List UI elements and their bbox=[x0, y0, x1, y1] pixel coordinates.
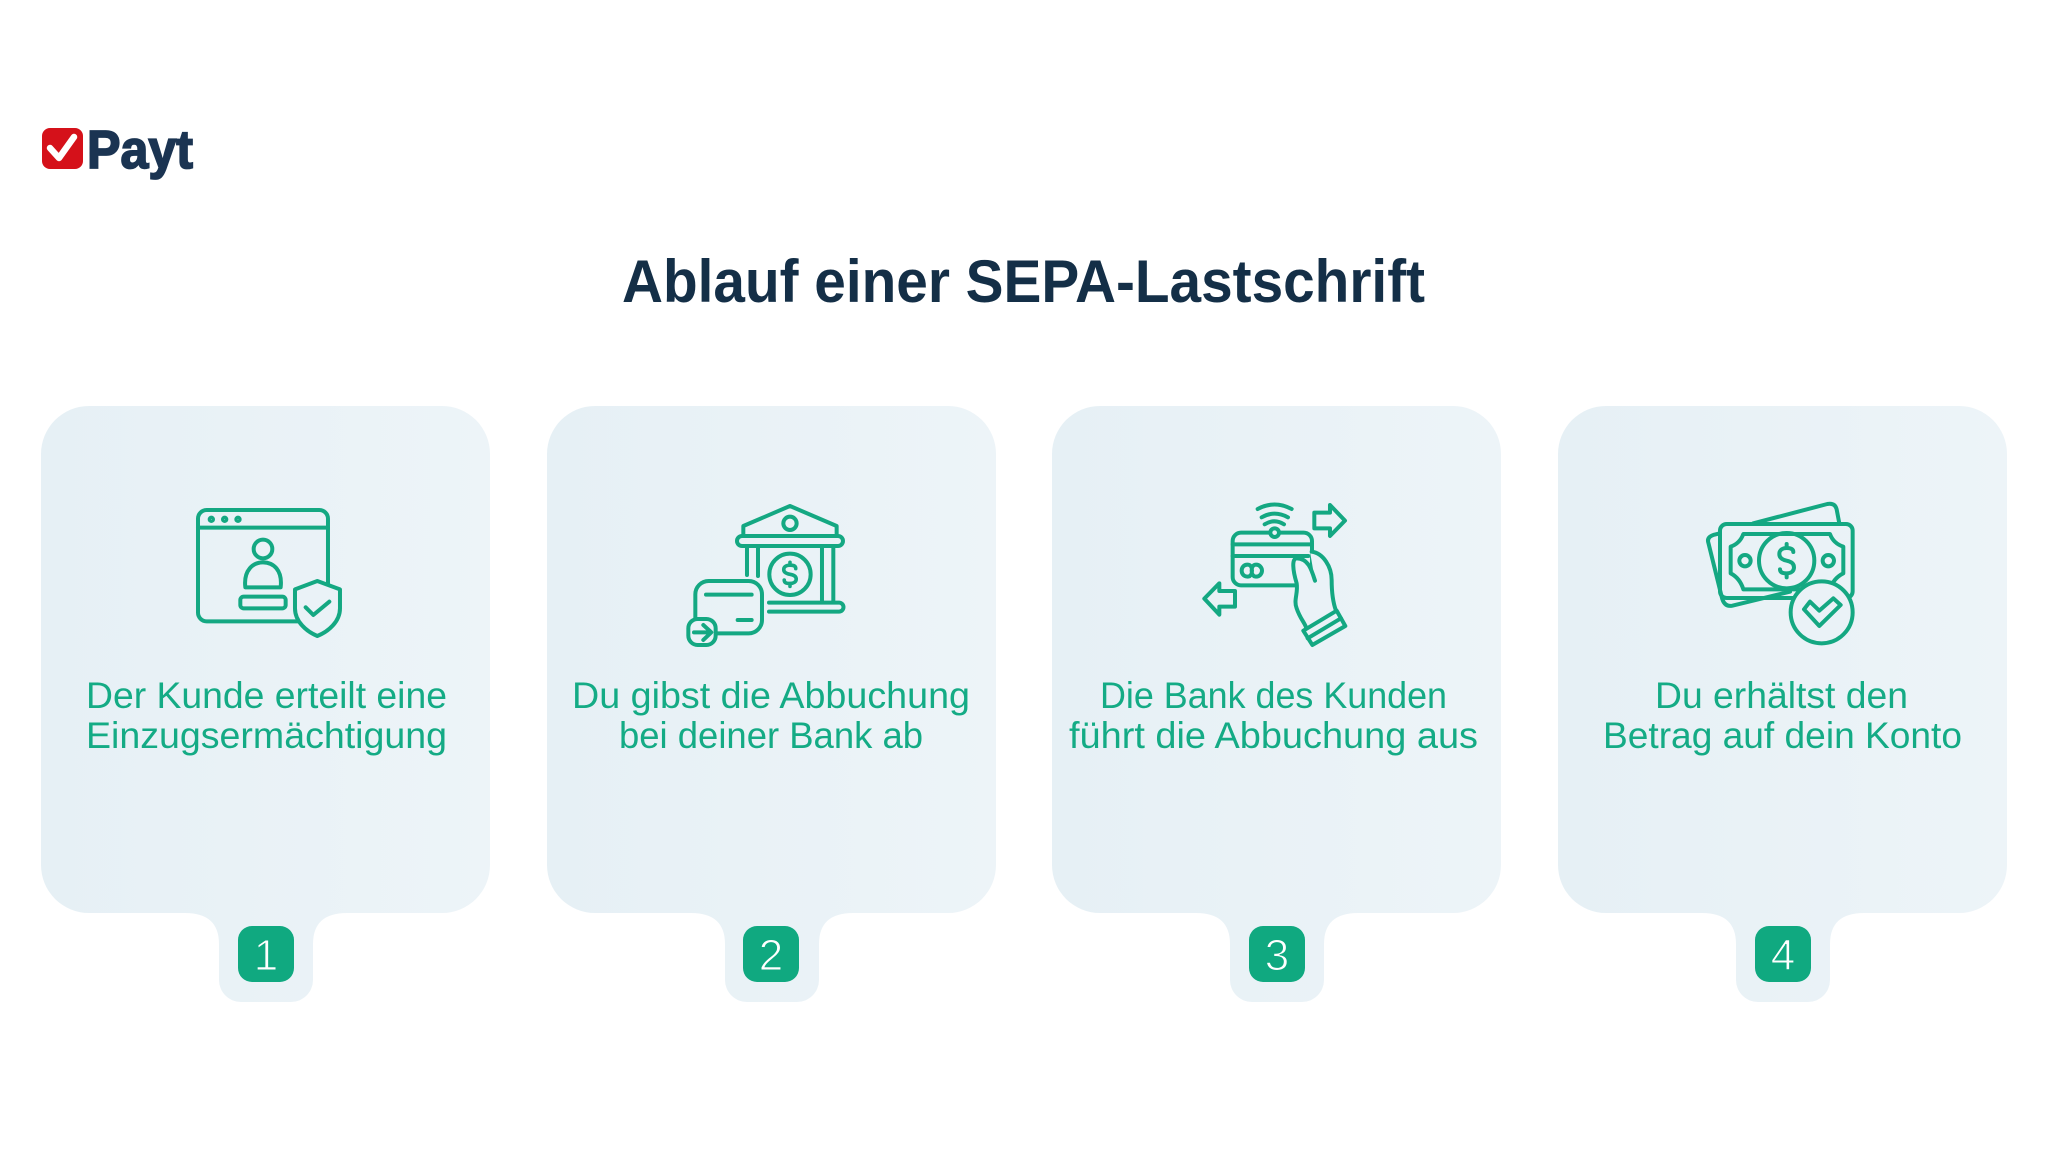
logo: Payt bbox=[42, 120, 193, 180]
number badge 2 bbox=[743, 926, 799, 982]
step text 2: bei deiner Bank ab bbox=[619, 715, 923, 756]
icon: hand holding contactless card with arrows bbox=[1204, 504, 1345, 645]
number badge 4 bbox=[1755, 926, 1811, 982]
card background 2 bbox=[547, 406, 996, 1002]
panel: step 2 bbox=[547, 406, 996, 1002]
step text 4: Betrag auf dein Konto bbox=[1603, 715, 1962, 756]
step text 4: Du erhältst den bbox=[1655, 675, 1908, 716]
card background 3 bbox=[1052, 406, 1501, 1002]
logo wordmark: Payt bbox=[87, 120, 193, 180]
number badge 4: 4 bbox=[1771, 931, 1795, 980]
panel: step 1 bbox=[41, 406, 490, 1002]
panel: step 3 bbox=[1052, 406, 1501, 1002]
icon: browser window with user and shield bbox=[198, 510, 340, 636]
step text 3: Die Bank des Kunden bbox=[1100, 675, 1447, 716]
step text 4 bbox=[1603, 675, 1962, 756]
step text 2 bbox=[572, 675, 970, 756]
step text 3: führt die Abbuchung aus bbox=[1069, 715, 1478, 756]
step text 3 bbox=[1069, 675, 1478, 756]
step text 1: Einzugsermächtigung bbox=[86, 715, 447, 756]
title: Ablauf einer SEPA-Lastschrift bbox=[622, 248, 1425, 315]
number badge 1: 1 bbox=[254, 931, 278, 980]
icon: bank and card bbox=[688, 506, 843, 645]
number badge 2: 2 bbox=[759, 931, 783, 980]
number badge 3 bbox=[1249, 926, 1305, 982]
card background 4 bbox=[1558, 406, 2007, 1002]
step text 2: Du gibst die Abbuchung bbox=[572, 675, 970, 716]
card background 1 bbox=[41, 406, 490, 1002]
panel: step 4 bbox=[1558, 406, 2007, 1002]
step text 1: Der Kunde erteilt eine bbox=[86, 675, 447, 716]
step text 1 bbox=[86, 675, 447, 756]
number badge 1 bbox=[238, 926, 294, 982]
logo mark: red check square bbox=[42, 128, 83, 169]
number badge 3: 3 bbox=[1265, 931, 1289, 980]
icon: banknotes with check bbox=[1708, 504, 1853, 643]
